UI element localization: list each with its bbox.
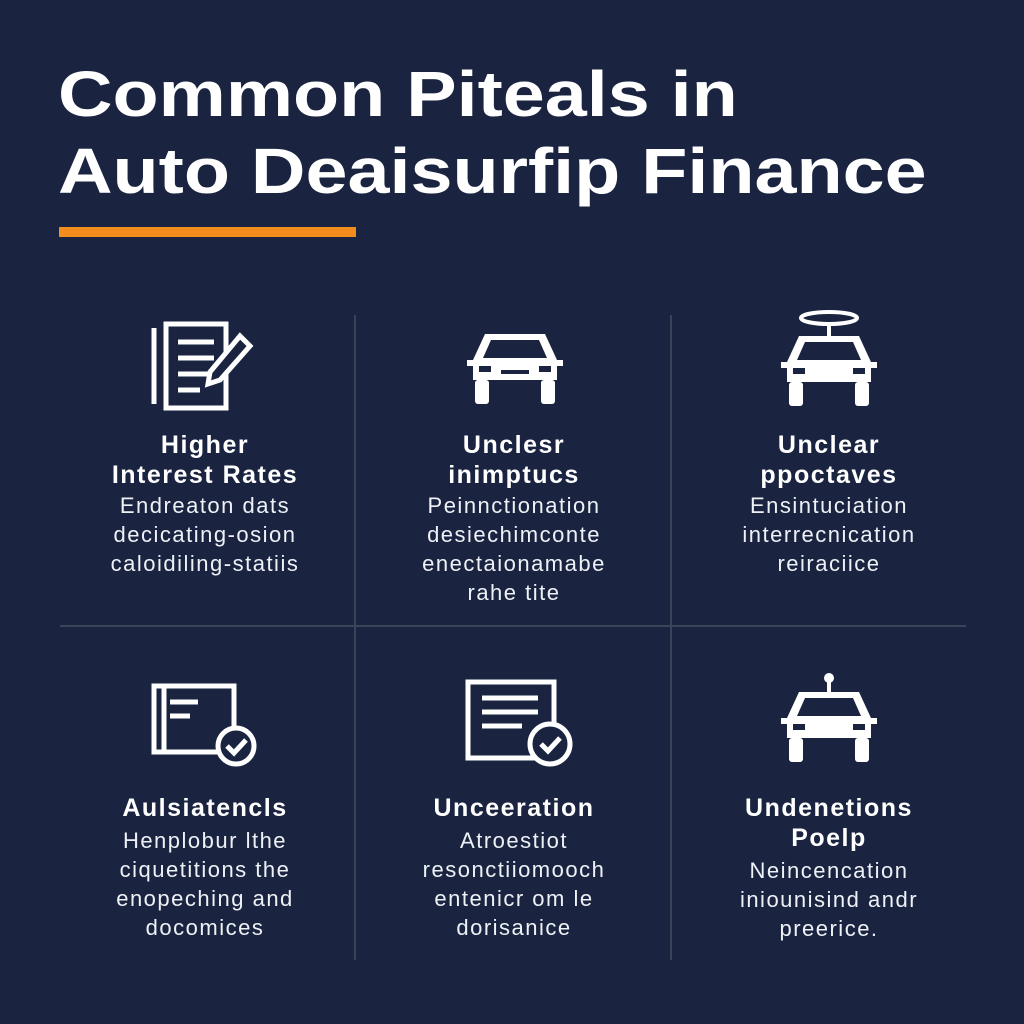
title (58, 58, 927, 207)
text: iniounisind andr (740, 887, 918, 912)
text: enectaionamabe (422, 551, 606, 576)
panel: unceeration (423, 680, 605, 940)
panel: higher interest rates (111, 322, 299, 576)
heading: inimptucs (448, 461, 580, 489)
text: docomices (146, 915, 264, 940)
text: desiechimconte (427, 522, 601, 547)
heading: Undenetions (745, 794, 913, 822)
text (423, 828, 605, 940)
heading (745, 794, 913, 852)
text (740, 858, 918, 941)
panel: undenetions poelp (740, 673, 918, 941)
accent bar (59, 227, 356, 237)
panel: unclesr inimptucs (422, 334, 606, 605)
heading: Unclear (778, 431, 880, 459)
heading: Unclesr (463, 431, 565, 459)
heading (112, 431, 298, 489)
text (111, 493, 299, 576)
icon: document with pen (152, 322, 254, 410)
icon: card with check (152, 684, 256, 766)
heading (760, 431, 898, 489)
heading: Poelp (791, 824, 867, 852)
text: rahe tite (468, 580, 560, 605)
heading: ppoctaves (760, 461, 898, 489)
text: reiraciice (777, 551, 881, 576)
text: entenicr om le (434, 886, 594, 911)
text: caloidiling-statiis (111, 551, 299, 576)
heading: Unceeration (434, 794, 594, 822)
icon: taxi car (781, 673, 877, 762)
text: ciquetitions the (120, 857, 290, 882)
text: Peinnctionation (428, 493, 600, 518)
text: interrecnication (742, 522, 916, 547)
heading: Interest Rates (112, 461, 298, 489)
panel: aulsiatencls (116, 684, 294, 940)
text: preerice. (779, 916, 879, 941)
heading: Higher (161, 431, 249, 459)
text (742, 493, 916, 576)
icon: car with halo (781, 310, 877, 406)
text (116, 828, 294, 940)
heading (448, 431, 580, 489)
text: Endreaton dats (120, 493, 290, 518)
title: Common Piteals in (58, 58, 738, 130)
heading: Aulsiatencls (122, 794, 288, 822)
text: dorisanice (456, 915, 572, 940)
text: decicating-osion (114, 522, 296, 547)
text (422, 493, 606, 605)
text: Atroestiot (460, 828, 568, 853)
text: Henplobur lthe (123, 828, 287, 853)
text: enopeching and (116, 886, 294, 911)
icon: document with check (466, 680, 572, 766)
text: resonctiiomooch (423, 857, 605, 882)
panel: unclear ppoctaves (742, 310, 916, 576)
title: Auto Deaisurfip Finance (58, 135, 927, 207)
text: Ensintuciation (750, 493, 908, 518)
text: Neincencation (750, 858, 908, 883)
icon: car (467, 334, 563, 404)
